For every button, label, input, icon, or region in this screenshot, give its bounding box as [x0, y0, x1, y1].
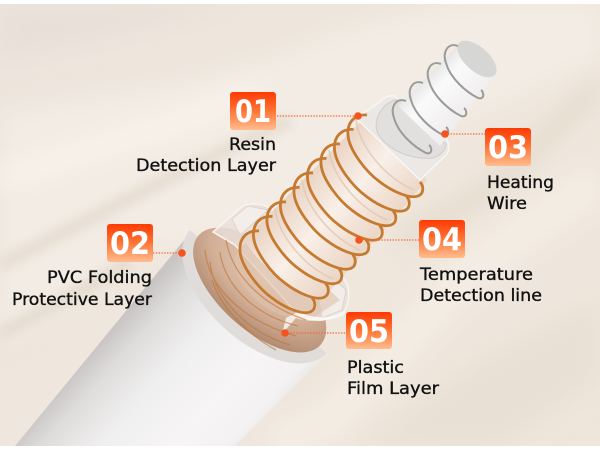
inner core: [244, 112, 427, 300]
callout 03: [441, 128, 554, 213]
tube rim: [182, 230, 326, 364]
core ribs: [275, 120, 414, 279]
callout 03: Heating: [487, 173, 554, 192]
plastic film layer: brown interior: [193, 228, 326, 352]
callout 04: Detection line: [420, 286, 542, 305]
illustration: layered heating tube: [15, 34, 503, 446]
callout 03: 03: [488, 130, 528, 166]
copper temperature detection coils: [240, 115, 423, 313]
callout 01: [136, 92, 362, 175]
inner white rod: [398, 43, 495, 146]
callout 04: 04: [422, 222, 462, 258]
callout 05: [281, 312, 439, 398]
brown inner coils seen through film: [205, 240, 306, 350]
callout 02: PVC Folding: [47, 268, 152, 287]
PVC folding protective layer tube: [15, 233, 324, 446]
grey heating wire coils: [393, 45, 483, 153]
callout 02: 02: [110, 226, 150, 262]
callout 04: Temperature: [419, 265, 533, 284]
callout 01: 01: [235, 94, 271, 130]
upper clear cap: [356, 96, 449, 180]
lower stage of inner cup: [242, 242, 346, 330]
callout 01: Detection Layer: [136, 156, 276, 175]
callout 01: Resin: [229, 135, 276, 154]
callout 02: Protective Layer: [12, 290, 152, 309]
callout 03: Wire: [487, 194, 527, 213]
rod end cap: [458, 40, 496, 78]
callout 04: [355, 220, 542, 305]
callout 05: Film Layer: [347, 379, 439, 398]
callout 05: 05: [349, 314, 389, 350]
clear collar: [213, 204, 349, 320]
callout 02: [12, 224, 186, 309]
callout 05: Plastic: [347, 358, 404, 377]
